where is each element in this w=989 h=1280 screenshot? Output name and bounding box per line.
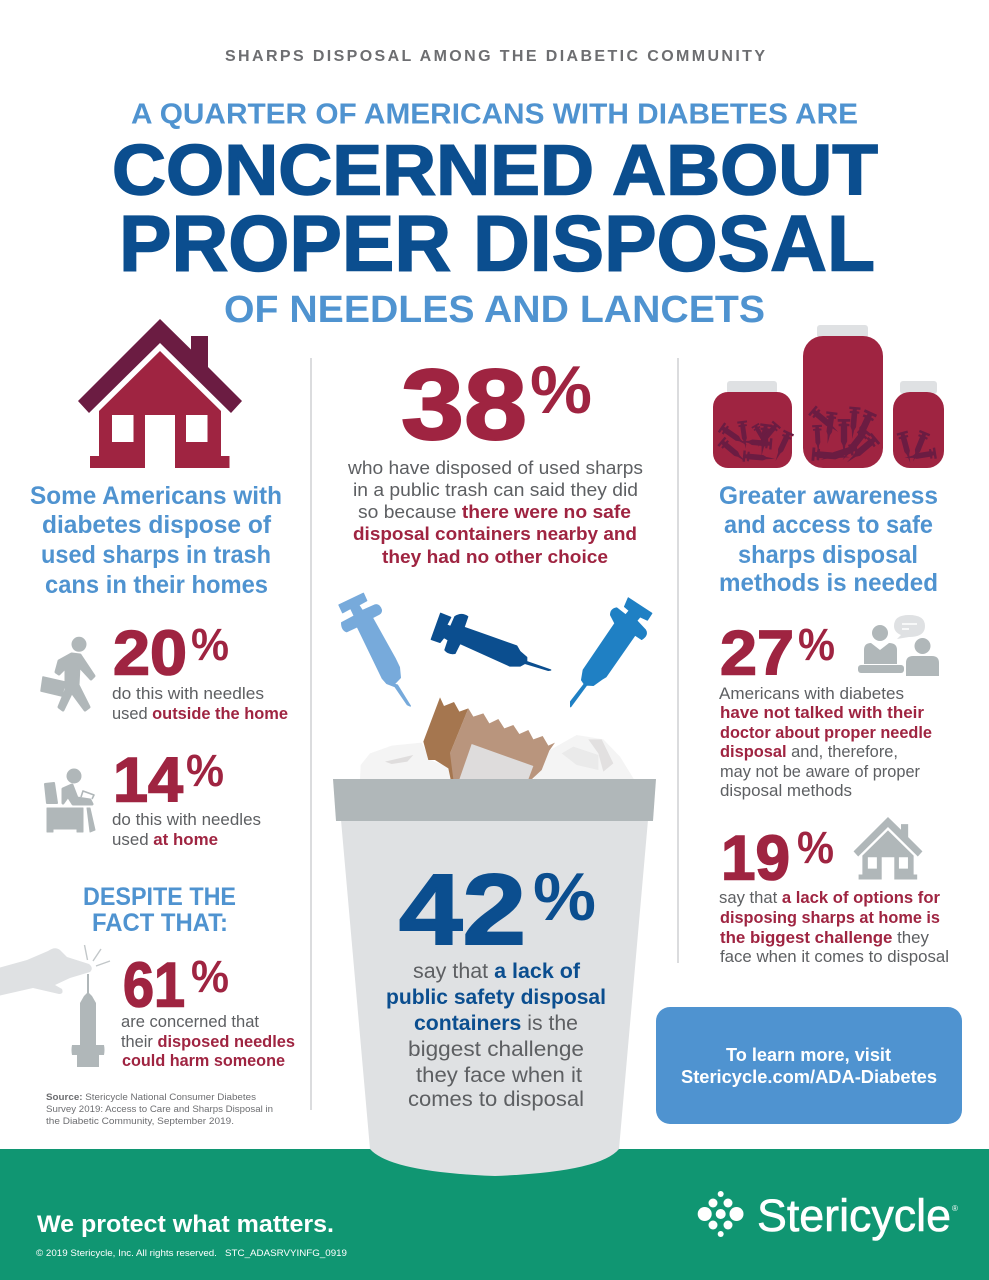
stat: 20 percent: 20	[113, 618, 187, 688]
title: CONCERNED ABOUT	[112, 132, 878, 210]
stat: 19 percent: say that a lack of options for	[719, 888, 940, 907]
stat: 27 percent: disposal methods	[720, 781, 852, 800]
icon: walking person with briefcase	[41, 637, 94, 710]
right heading	[719, 482, 938, 597]
stat: 42 percent	[399, 854, 596, 966]
trash can paragraph: comes to disposal	[408, 1088, 584, 1111]
stat: 27 percent: 27	[720, 618, 794, 688]
stat: 20 percent	[112, 618, 288, 723]
stat: 19 percent: face when it comes to disposal	[720, 947, 949, 966]
icon: person seated in armchair	[45, 768, 95, 832]
icon: grey house	[854, 817, 922, 880]
stat: 27 percent: %	[798, 619, 835, 670]
trash can paragraph: containers is the	[414, 1012, 578, 1035]
despite the fact heading	[83, 883, 236, 937]
stat: 27 percent: doctor about proper needle	[720, 723, 932, 742]
title: A QUARTER OF AMERICANS WITH DIABETES ARE	[131, 98, 858, 130]
icon: sharps containers	[713, 325, 944, 468]
stericycle logo: Stericycle	[757, 1190, 951, 1241]
stat: 42 percent: 42	[399, 854, 526, 966]
center paragraph: in a public trash can said they did	[353, 479, 638, 500]
icon: patient talking with doctor	[858, 615, 939, 676]
stat: 61 percent: 61	[123, 950, 185, 1020]
stat: 14 percent	[112, 745, 261, 849]
despite the fact heading: DESPITE THE	[83, 883, 236, 911]
right heading: methods is needed	[719, 569, 938, 597]
trash can paragraph: they face when it	[416, 1064, 582, 1087]
trash can	[333, 779, 656, 1176]
source note: Source: Stericycle National Consumer Diabetes	[46, 1092, 256, 1103]
kicker heading: SHARPS DISPOSAL AMONG THE DIABETIC COMMUNITY	[225, 48, 765, 65]
stat: 61 percent: could harm someone	[122, 1051, 285, 1070]
stat: 42 percent: %	[533, 859, 596, 935]
center paragraph: they had no other choice	[382, 546, 608, 567]
call to action box	[656, 1007, 962, 1124]
stat: 19 percent	[719, 822, 949, 966]
stat: 19 percent: the biggest challenge they	[720, 928, 929, 947]
call to action box: Stericycle.com/ADA-Diabetes	[681, 1067, 937, 1087]
stat: 14 percent: used at home	[112, 830, 218, 849]
stat: 61 percent: %	[191, 951, 229, 1002]
source note: the Diabetic Community, September 2019.	[46, 1116, 234, 1127]
footer tagline: We protect what matters.	[37, 1211, 334, 1238]
icon: crumpled paper and torn box	[360, 697, 634, 779]
stat: 19 percent: 19	[721, 824, 790, 894]
title: PROPER DISPOSAL	[119, 198, 875, 288]
title	[112, 98, 878, 331]
trash can paragraph	[386, 960, 606, 1111]
call to action box: To learn more, visit	[726, 1045, 891, 1065]
stat: 20 percent: do this with needles	[112, 684, 264, 703]
stat: 20 percent: %	[191, 619, 229, 670]
center paragraph	[347, 457, 643, 567]
right heading: and access to safe	[724, 511, 933, 539]
stericycle logo: ®	[952, 1204, 958, 1213]
trash can paragraph: public safety disposal	[386, 986, 606, 1009]
stat: 19 percent: disposing sharps at home is	[720, 908, 940, 927]
left heading: used sharps in trash	[41, 541, 271, 569]
stat: 61 percent: are concerned that	[121, 1012, 259, 1031]
stat: 19 percent: %	[797, 822, 834, 873]
title: OF NEEDLES AND LANCETS	[224, 289, 765, 331]
icon: red house	[78, 319, 242, 468]
trash can paragraph: say that a lack of	[413, 960, 581, 983]
stat: 61 percent: their disposed needles	[121, 1032, 295, 1051]
stat: 38 percent	[401, 349, 592, 461]
stat: 27 percent	[719, 618, 932, 800]
stat: 14 percent: 14	[113, 746, 183, 816]
footer band	[0, 1149, 989, 1280]
stat: 27 percent: disposal and, therefore,	[720, 742, 898, 761]
left heading: Some Americans with	[30, 482, 282, 510]
stat: 27 percent: may not be aware of proper	[720, 762, 920, 781]
center paragraph: so because there were no safe	[358, 501, 631, 522]
source note	[46, 1092, 273, 1127]
stat: 38 percent: %	[530, 352, 592, 428]
trash can paragraph: biggest challenge	[408, 1038, 584, 1061]
right heading: Greater awareness	[719, 482, 938, 510]
center paragraph: who have disposed of used sharps	[347, 457, 643, 478]
stat: 20 percent: used outside the home	[112, 704, 288, 723]
stat: 27 percent: Americans with diabetes	[719, 684, 904, 703]
stat: 14 percent: %	[186, 745, 224, 796]
icon: finger pricked by syringe	[0, 945, 110, 1067]
stat: 38 percent: 38	[401, 349, 527, 461]
left heading: cans in their homes	[45, 571, 268, 599]
despite the fact heading: FACT THAT:	[92, 909, 228, 937]
left heading	[30, 482, 282, 599]
stat: 27 percent: have not talked with their	[720, 703, 924, 722]
stat: 14 percent: do this with needles	[112, 810, 261, 829]
stat: 61 percent	[121, 950, 295, 1070]
left heading: diabetes dispose of	[42, 511, 272, 539]
copyright line: © 2019 Stericycle, Inc. All rights reserved. STC_ADASRVYINFG_0919	[36, 1248, 347, 1259]
source note: Survey 2019: Access to Care and Sharps Disposal in	[46, 1104, 273, 1115]
center paragraph: disposal containers nearby and	[353, 523, 637, 544]
icon: three falling syringes	[339, 593, 652, 707]
right heading: sharps disposal	[738, 541, 918, 569]
